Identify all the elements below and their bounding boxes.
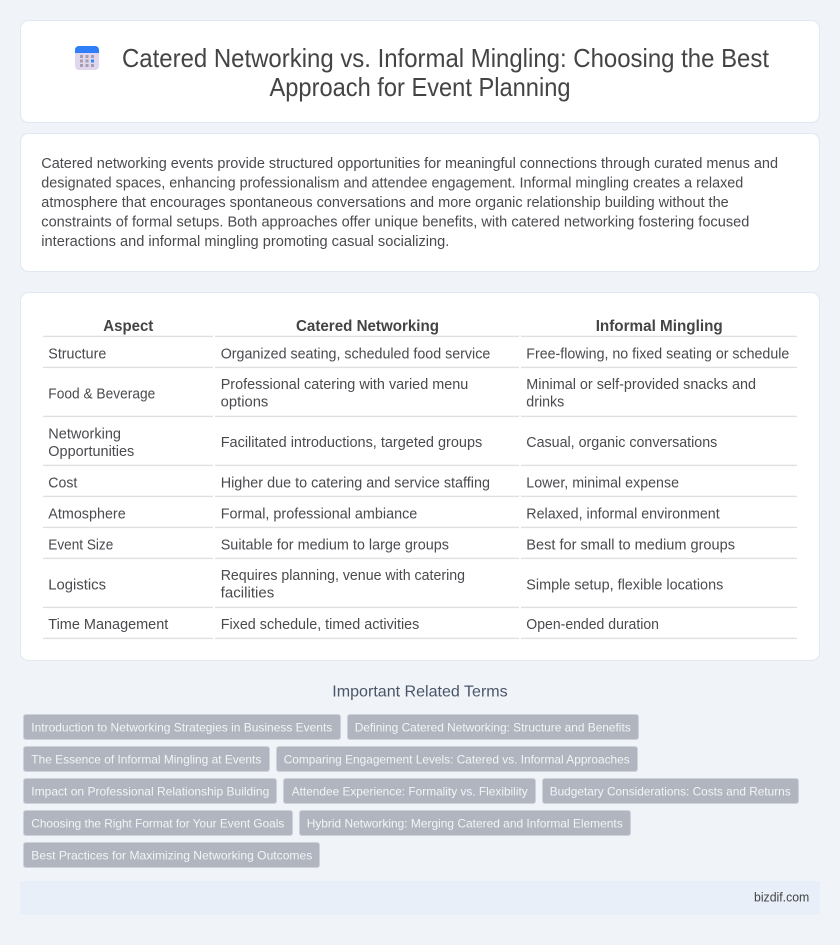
row: logistics: Requires planning, venue with catering	[221, 568, 465, 584]
row: logistics	[48, 568, 723, 602]
tag: best practices	[24, 842, 320, 868]
row: time management	[48, 617, 659, 633]
row: logistics: facilities	[221, 586, 274, 602]
panel: comparison table card	[20, 292, 820, 660]
row: atmosphere	[48, 506, 720, 522]
tag: choosing the right format: Choosing the Right Format for Your Event Goals	[31, 816, 284, 830]
row: logistics: Logistics	[48, 577, 106, 593]
tag: comparing engagement levels: Comparing Engagement Levels: Catered vs. Informal Approaches	[284, 752, 630, 766]
intro text block: interactions and informal mingling promoting casual socializing.	[41, 234, 449, 250]
row: structure: Organized seating, scheduled food service	[221, 346, 490, 362]
row: networking opportunities: Networking	[48, 426, 121, 442]
footer bar: bizdif.com	[754, 890, 809, 905]
row: cost: Lower, minimal expense	[526, 475, 679, 491]
panel: related term tags	[24, 714, 798, 868]
panel: title card	[20, 20, 820, 122]
tag: defining catered networking	[348, 714, 638, 740]
row: atmosphere: Formal, professional ambiance	[221, 506, 417, 522]
heading: important related terms: Important Related Terms	[332, 684, 508, 701]
icon: calendar	[75, 46, 99, 70]
tag: defining catered networking: Defining Catered Networking: Structure and Benefits	[355, 720, 631, 734]
intro text block: designated spaces, enhancing professionalism and attendee engagement. Informal mingling creates a relaxed	[41, 176, 743, 192]
footer bar	[20, 881, 820, 915]
row: logistics: Simple setup, flexible locations	[526, 577, 723, 593]
title: Approach for Event Planning	[270, 74, 570, 102]
tag: impact on relationship building	[24, 778, 276, 804]
row: event size: Event Size	[48, 537, 113, 553]
row: time management: Open-ended duration	[526, 617, 659, 633]
row: networking opportunities: Facilitated introductions, targeted groups	[221, 435, 482, 451]
panel: intro paragraph card	[20, 134, 820, 272]
row: event size	[48, 537, 735, 553]
tag: attendee experience: Attendee Experience: Formality vs. Flexibility	[292, 784, 528, 798]
row: cost: Higher due to catering and service staffing	[221, 475, 490, 491]
row: networking opportunities: Casual, organic conversations	[526, 435, 717, 451]
row: cost	[48, 475, 679, 491]
row: structure: Structure	[48, 346, 106, 362]
row: food and beverage: Professional catering with varied menu	[221, 377, 468, 393]
tag: budgetary considerations: Budgetary Considerations: Costs and Returns	[550, 784, 791, 798]
tag: choosing the right format	[24, 810, 292, 836]
intro text block: constraints of formal setups. Both approaches offer unique benefits, with catered networking fostering focused	[41, 215, 749, 231]
row: time management: Fixed schedule, timed activities	[221, 617, 419, 633]
row: time management: Time Management	[48, 617, 168, 633]
title: Catered Networking vs. Informal Mingling: Choosing the Best	[122, 45, 769, 73]
intro text block: atmosphere that encourages spontaneous conversations and more organic relationship building without the	[41, 195, 729, 211]
tag: introduction to networking strategies: Introduction to Networking Strategies in Business Events	[31, 720, 332, 734]
row: food and beverage: options	[221, 395, 268, 411]
intro text block: Catered networking events provide structured opportunities for meaningful connections through curated menus and	[41, 156, 778, 172]
tag: impact on relationship building: Impact on Professional Relationship Building	[31, 784, 269, 798]
row: atmosphere: Relaxed, informal environment	[526, 506, 720, 522]
tag: comparing engagement levels	[276, 746, 638, 772]
tag: hybrid networking: Hybrid Networking: Merging Catered and Informal Elements	[307, 816, 623, 830]
tag: budgetary considerations	[542, 778, 798, 804]
table header row	[103, 318, 723, 335]
tag: essence of informal mingling: The Essence of Informal Mingling at Events	[31, 752, 261, 766]
row: networking opportunities	[48, 426, 717, 460]
row: cost: Cost	[48, 475, 77, 491]
row: structure	[48, 346, 789, 362]
row: food and beverage: Food & Beverage	[48, 386, 155, 402]
tag: best practices: Best Practices for Maximizing Networking Outcomes	[31, 848, 312, 862]
tag: hybrid networking	[300, 810, 630, 836]
row: structure: Free-flowing, no fixed seating or schedule	[526, 346, 789, 362]
row: event size: Suitable for medium to large groups	[221, 537, 449, 553]
row: networking opportunities: Opportunities	[48, 444, 134, 460]
row: atmosphere: Atmosphere	[48, 506, 126, 522]
tag: essence of informal mingling	[24, 746, 270, 772]
table header row: Aspect	[103, 318, 153, 335]
tag: introduction to networking strategies	[24, 714, 340, 740]
title	[122, 45, 769, 102]
table header row: Informal Mingling	[596, 318, 723, 335]
row: food and beverage	[48, 377, 756, 411]
intro text block	[41, 156, 778, 250]
table header row: Catered Networking	[296, 318, 439, 335]
tag: attendee experience	[284, 778, 536, 804]
row: food and beverage: drinks	[526, 395, 564, 411]
row: event size: Best for small to medium groups	[526, 537, 735, 553]
row: food and beverage: Minimal or self-provided snacks and	[526, 377, 756, 393]
